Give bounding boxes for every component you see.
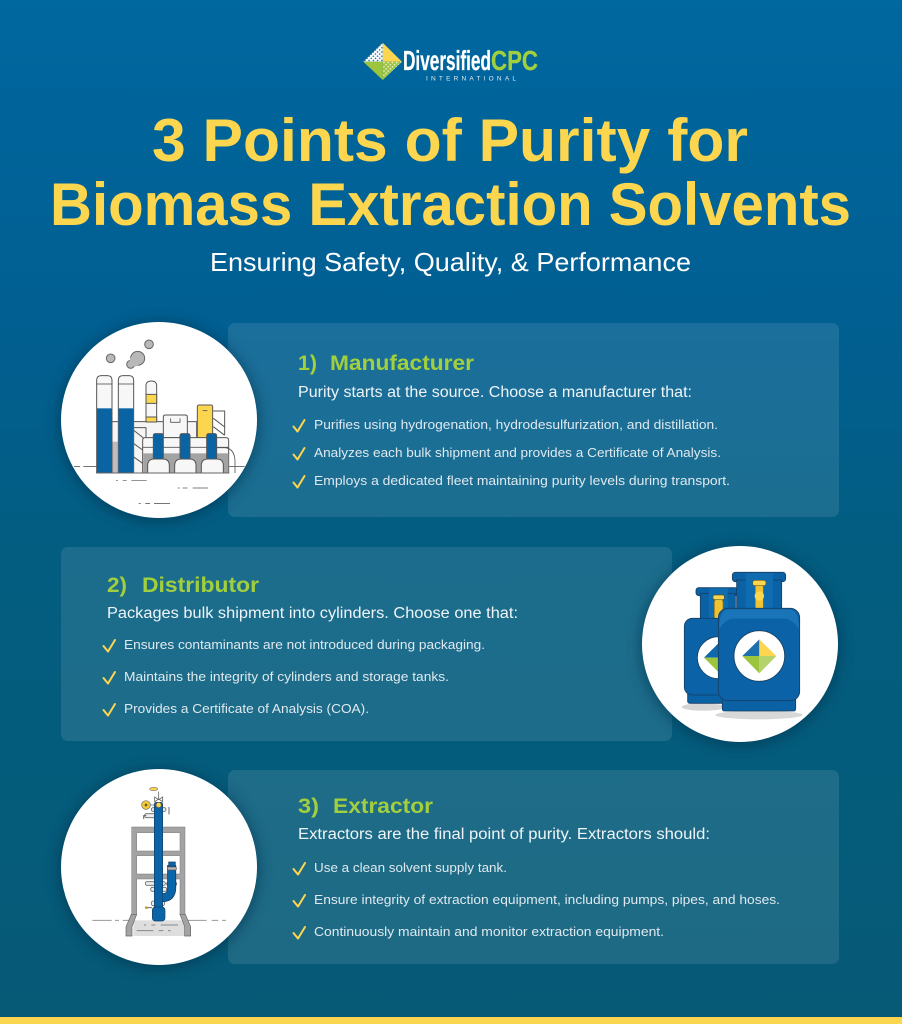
checklist: distributor: Ensures contaminants are not introduced during packaging. — [124, 637, 485, 652]
title: Biomass Extraction Solvents — [50, 171, 851, 238]
panel: distributor — [61, 547, 672, 741]
checklist: distributor — [104, 637, 485, 716]
checklist: distributor: Maintains the integrity of cylinders and storage tanks. — [124, 669, 449, 684]
title — [50, 107, 851, 238]
intro: manufacturer: Purity starts at the source. Choose a manufacturer that: — [298, 384, 692, 401]
heading: distributor: 2) — [107, 574, 127, 597]
title: 3 Points of Purity for — [152, 107, 748, 174]
heading: distributor: Distributor — [142, 574, 259, 597]
checklist: extractor: Use a clean solvent supply tank. — [314, 860, 507, 875]
intro: extractor: Extractors are the final point of purity. Extractors should: — [298, 826, 710, 843]
heading: manufacturer: 1) — [298, 352, 317, 375]
heading: extractor: 3) — [298, 795, 319, 818]
checklist: extractor: Ensure integrity of extraction equipment, including pumps, pipes, and hoses. — [314, 892, 780, 907]
icon: factory — [59, 322, 259, 522]
checklist: manufacturer: Employs a dedicated fleet maintaining purity levels during transport. — [314, 473, 730, 488]
logo — [363, 43, 538, 82]
logo: INTERNATIONAL — [426, 76, 516, 82]
heading: manufacturer: Manufacturer — [330, 352, 474, 375]
subtitle: Ensuring Safety, Quality, & Performance — [210, 247, 691, 277]
logo: Diversified — [403, 45, 491, 76]
checklist: extractor — [294, 860, 780, 939]
footer bar — [0, 1017, 902, 1024]
icon: extraction equipment — [59, 769, 259, 969]
panel: extractor — [228, 770, 839, 964]
intro: distributor: Packages bulk shipment into cylinders. Choose one that: — [107, 605, 518, 622]
checklist: manufacturer: Analyzes each bulk shipment and provides a Certificate of Analysis. — [314, 445, 721, 460]
icon: gas cylinders — [640, 546, 840, 746]
heading: extractor — [298, 795, 433, 818]
panel: manufacturer — [228, 323, 839, 517]
checklist: extractor: Continuously maintain and monitor extraction equipment. — [314, 924, 664, 939]
checklist: manufacturer: Purifies using hydrogenation, hydrodesulfurization, and distillation. — [314, 417, 718, 432]
logo: CPC — [491, 45, 538, 76]
heading: extractor: Extractor — [333, 795, 433, 818]
checklist: manufacturer — [294, 417, 730, 488]
checklist: distributor: Provides a Certificate of Analysis (COA). — [124, 701, 369, 716]
